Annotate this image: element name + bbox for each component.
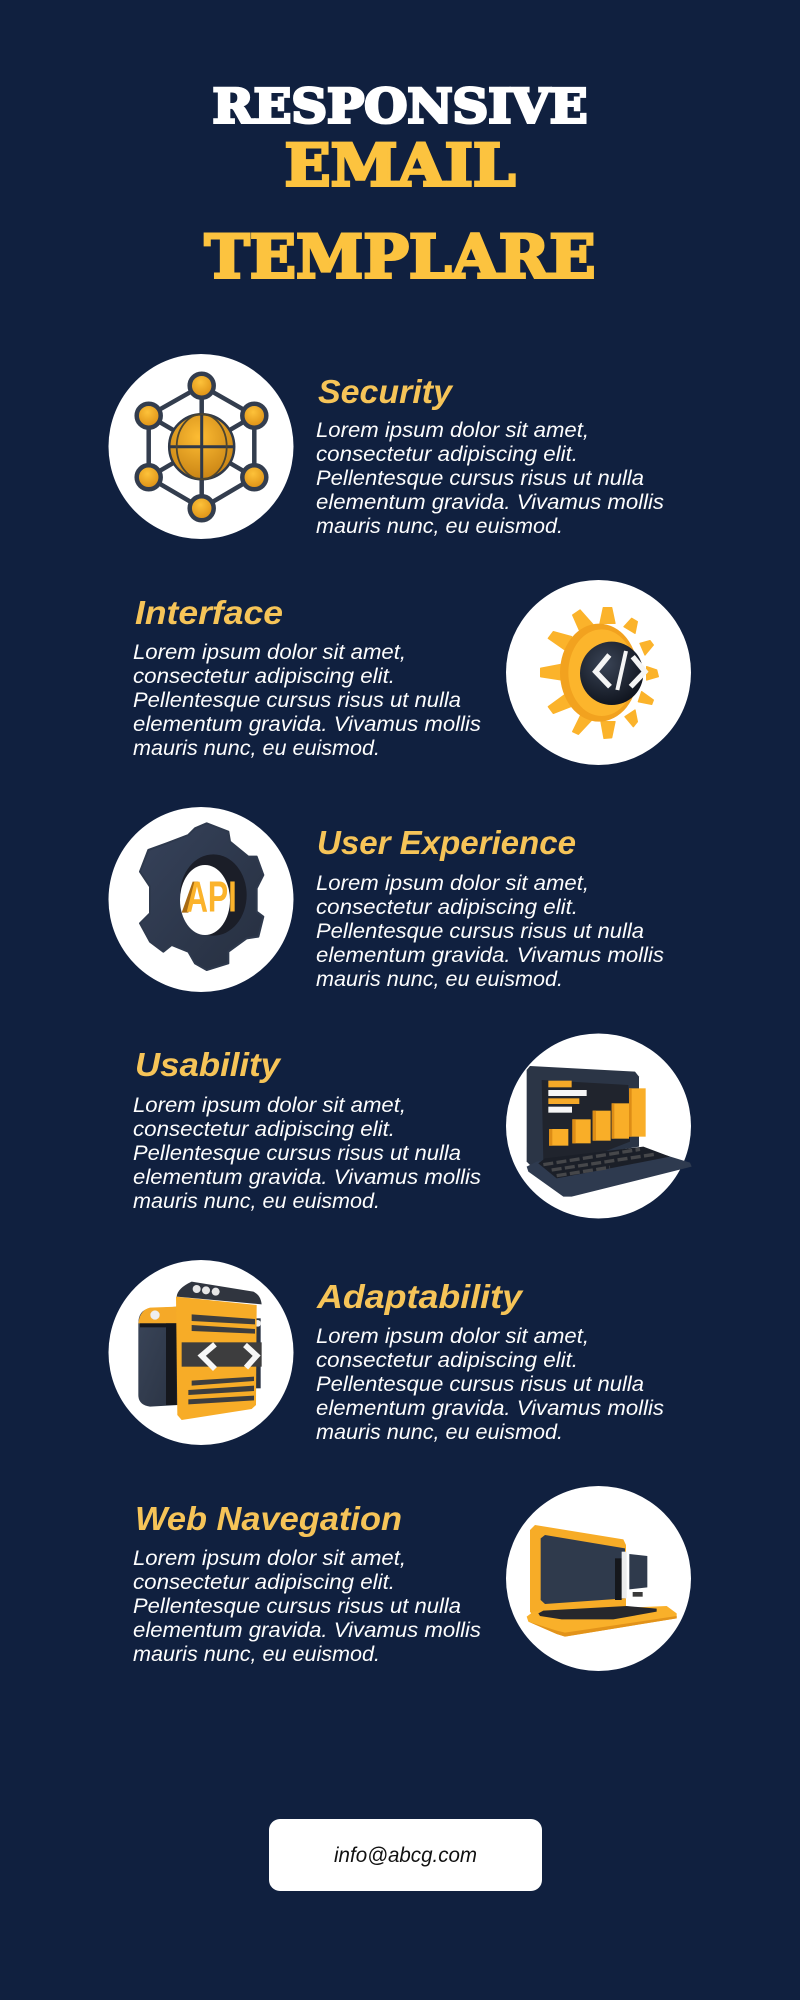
text block: security: Lorem ipsum dolor sit amet, (316, 418, 589, 442)
text block: web navegation (133, 1546, 481, 1666)
title: TEMPLARE (204, 222, 596, 292)
text block: usability: Lorem ipsum dolor sit amet, (133, 1093, 406, 1117)
heading: Security: Security (318, 373, 454, 410)
text block: web navegation: Lorem ipsum dolor sit amet, (133, 1546, 406, 1570)
icon: network globe (108, 354, 294, 539)
text block: adaptability (316, 1324, 664, 1444)
title (204, 80, 596, 292)
text block: usability: consectetur adipiscing elit. (133, 1117, 395, 1141)
icon: API gear: API (186, 874, 237, 922)
text block: web navegation: elementum gravida. Vivamus mollis (133, 1618, 481, 1642)
title: RESPONSIVE (212, 80, 588, 134)
text block: usability: elementum gravida. Vivamus mollis (133, 1165, 481, 1189)
text block: adaptability: mauris nunc, eu euismod. (316, 1420, 563, 1444)
text block: interface: Pellentesque cursus risus ut nulla (133, 688, 461, 712)
text block: user experience (316, 871, 664, 991)
title: EMAIL (284, 132, 516, 200)
text block: security: elementum gravida. Vivamus mollis (316, 490, 664, 514)
button: contact email: info@abcg.com (334, 1844, 477, 1867)
text block: usability (133, 1093, 481, 1213)
panel: security (108, 354, 664, 539)
icon: yellow laptop (506, 1486, 691, 1671)
text block: adaptability: Lorem ipsum dolor sit amet, (316, 1324, 589, 1348)
text block: user experience: elementum gravida. Vivamus mollis (316, 943, 664, 967)
text block: usability: mauris nunc, eu euismod. (133, 1189, 380, 1213)
text block: adaptability: elementum gravida. Vivamus mollis (316, 1396, 664, 1420)
text block: web navegation: consectetur adipiscing elit. (133, 1570, 395, 1594)
text block: user experience: Lorem ipsum dolor sit amet, (316, 871, 589, 895)
heading: Usability: Usability (135, 1046, 282, 1083)
text block: security: consectetur adipiscing elit. (316, 442, 578, 466)
icon: responsive window (108, 1260, 294, 1445)
icon: API gear (108, 807, 294, 992)
panel: interface (133, 580, 691, 765)
text block: interface: Lorem ipsum dolor sit amet, (133, 640, 406, 664)
text block: web navegation: mauris nunc, eu euismod. (133, 1642, 380, 1666)
text block: user experience: mauris nunc, eu euismod. (316, 967, 563, 991)
text block: adaptability: consectetur adipiscing elit. (316, 1348, 578, 1372)
text block: user experience: Pellentesque cursus risus ut nulla (316, 919, 644, 943)
panel: adaptability (108, 1260, 664, 1445)
text block: interface: consectetur adipiscing elit. (133, 664, 395, 688)
panel: usability (133, 1034, 692, 1218)
heading: Web Navegation: Web Navegation (135, 1500, 402, 1537)
text block: interface: elementum gravida. Vivamus mollis (133, 712, 481, 736)
panel: web navegation (133, 1486, 691, 1671)
text block: user experience: consectetur adipiscing elit. (316, 895, 578, 919)
text block: web navegation: Pellentesque cursus risus ut nulla (133, 1594, 461, 1618)
button: contact email (269, 1819, 542, 1891)
text block: security: Pellentesque cursus risus ut nulla (316, 466, 644, 490)
text block: adaptability: Pellentesque cursus risus ut nulla (316, 1372, 644, 1396)
text block: interface: mauris nunc, eu euismod. (133, 736, 380, 760)
text block: security (316, 418, 664, 538)
heading: User Experience: User Experience (317, 824, 576, 861)
panel: user experience (108, 807, 664, 992)
text block: security: mauris nunc, eu euismod. (316, 514, 563, 538)
icon: laptop chart (506, 1034, 692, 1218)
heading: Interface: Interface (135, 594, 283, 631)
text block: interface (133, 640, 481, 760)
heading: Adaptability: Adaptability (316, 1278, 524, 1315)
text block: usability: Pellentesque cursus risus ut nulla (133, 1141, 461, 1165)
icon: code gear (506, 580, 691, 765)
